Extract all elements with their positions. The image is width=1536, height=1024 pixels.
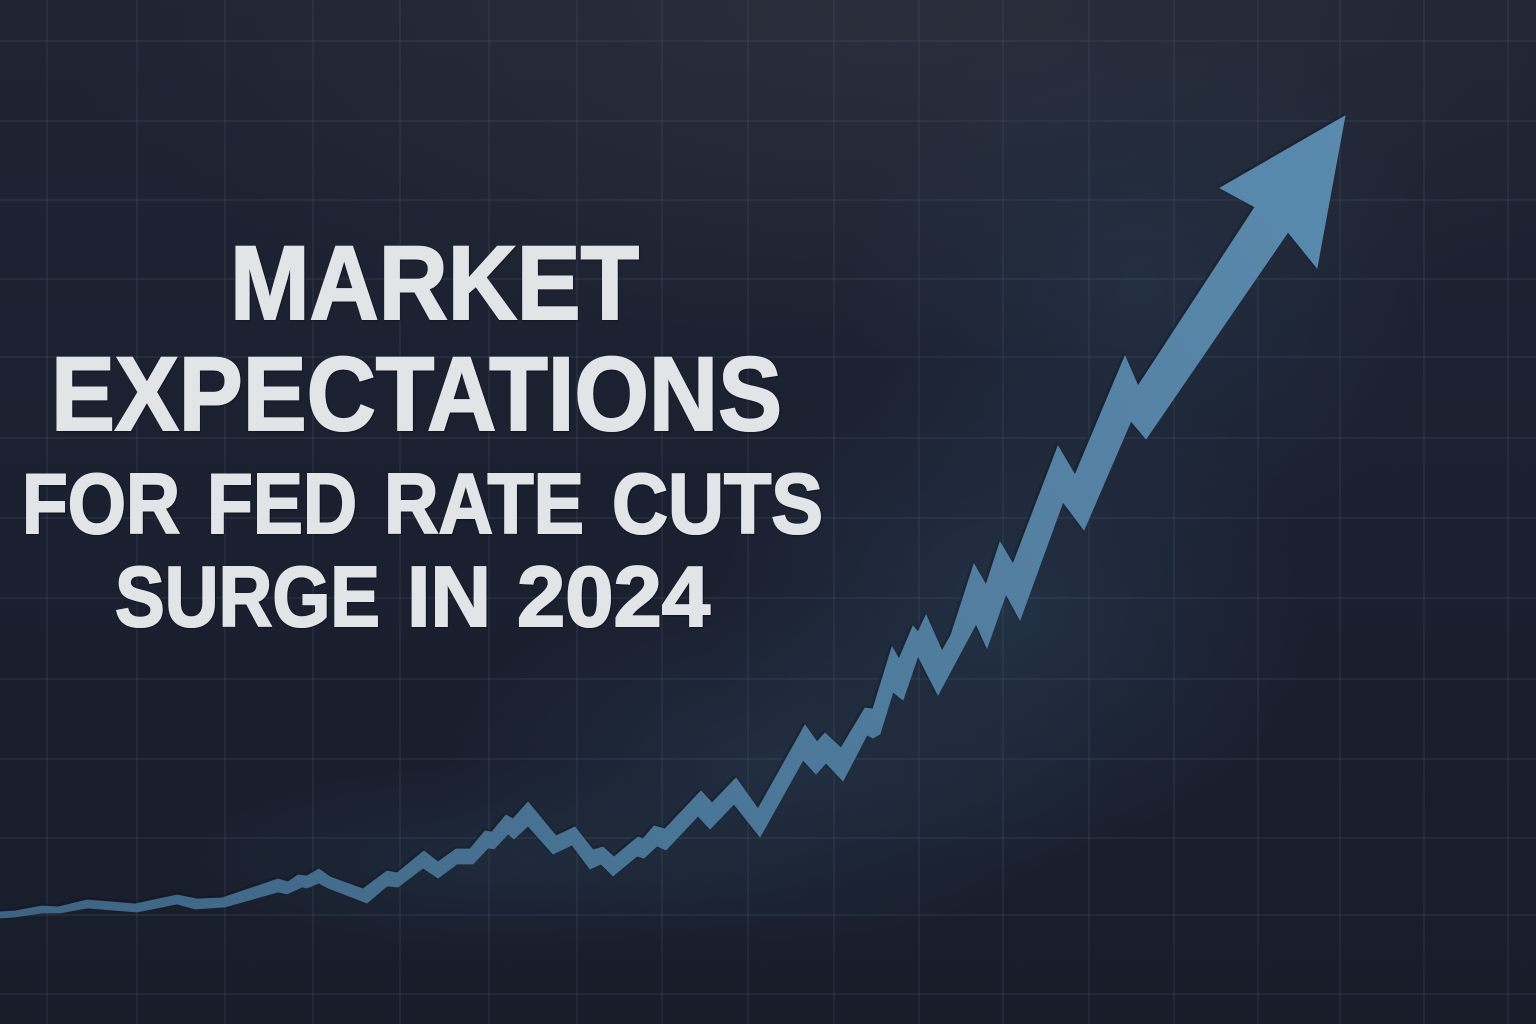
rising line chart arrow	[0, 116, 1345, 918]
title line: SURGE IN 2024: 2024	[517, 550, 710, 645]
title line: SURGE IN 2024: IN	[407, 550, 491, 645]
title line: SURGE IN 2024: SURGE	[115, 550, 380, 645]
title line: FOR FED RATE CUTS: CUTS	[612, 457, 823, 552]
title line: FOR FED RATE CUTS	[22, 457, 823, 552]
title line: FOR FED RATE CUTS: FOR	[22, 457, 180, 552]
title line: MARKET: MARKET	[230, 225, 639, 342]
title line: FOR FED RATE CUTS: FED	[207, 457, 357, 552]
title line: FOR FED RATE CUTS: RATE	[384, 457, 584, 552]
title line: SURGE IN 2024	[115, 550, 710, 645]
title	[22, 225, 823, 645]
title line: EXPECTATIONS: EXPECTATIONS	[51, 336, 782, 453]
